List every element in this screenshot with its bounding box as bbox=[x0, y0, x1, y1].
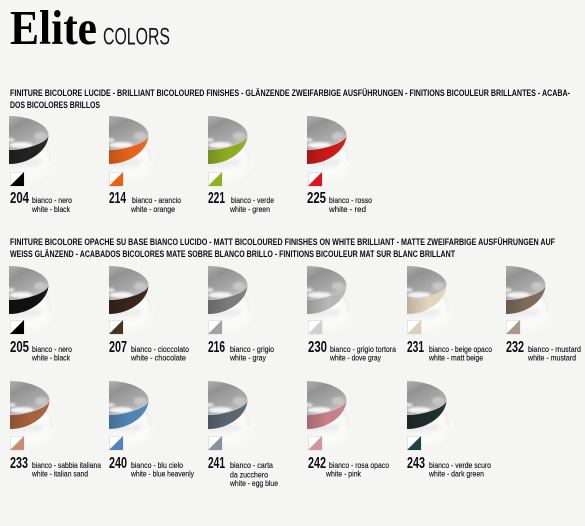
colour 204 bbox=[1, 116, 72, 214]
colour 221: 221 bbox=[208, 190, 225, 207]
heading: matt bicoloured finishes bbox=[10, 237, 555, 260]
colour 232: 232 bbox=[506, 339, 524, 356]
colour 207 bbox=[101, 266, 189, 362]
colour 204: bianco - nero bbox=[32, 195, 72, 205]
colour 225 bbox=[299, 116, 372, 214]
colour 214: white - orange bbox=[130, 204, 175, 214]
title: COLORS bbox=[103, 24, 170, 50]
colour 243: bianco - verde scuro bbox=[429, 460, 491, 470]
colour 216: bianco - grigio bbox=[230, 344, 274, 354]
colour 207: white - chocolate bbox=[130, 352, 186, 362]
colour 221: white - green bbox=[229, 204, 270, 214]
colour 230 bbox=[299, 266, 396, 362]
colour 231: bianco - beige opaco bbox=[429, 344, 492, 354]
colour 241: white - egg blue bbox=[229, 478, 278, 488]
colour 242: bianco - rosa opaco bbox=[329, 460, 389, 470]
colour 231: white - matt beige bbox=[428, 352, 483, 362]
colour 204: white - black bbox=[31, 204, 71, 214]
colour 214: 214 bbox=[109, 190, 126, 207]
colour 216: 216 bbox=[208, 339, 225, 356]
title bbox=[10, 0, 170, 55]
colour 243 bbox=[399, 381, 491, 478]
colour 214 bbox=[101, 116, 181, 214]
colour 242: white - pink bbox=[325, 468, 362, 478]
colour 233: white - italian sand bbox=[31, 468, 88, 478]
colour 221: bianco - verde bbox=[231, 195, 274, 205]
heading: brilliant bicoloured finishes: DOS BICOLORES BRILLOS bbox=[10, 100, 100, 111]
colour 241: 241 bbox=[208, 455, 225, 472]
title: Elite bbox=[10, 0, 97, 55]
colour 232 bbox=[498, 266, 581, 362]
colour 233: 233 bbox=[10, 455, 28, 472]
colour 225: 225 bbox=[307, 190, 326, 207]
colour 243: white - dark green bbox=[428, 468, 484, 478]
colour 241 bbox=[200, 381, 278, 488]
colour 205: bianco - nero bbox=[32, 344, 72, 354]
colour 231: 231 bbox=[407, 339, 424, 356]
colour 205: 205 bbox=[10, 339, 29, 356]
colour 205 bbox=[1, 266, 72, 362]
colour 240: white - blue heavenly bbox=[130, 468, 195, 478]
colour 230: 230 bbox=[308, 339, 327, 356]
colour 242 bbox=[299, 381, 389, 478]
colour 216 bbox=[200, 266, 274, 362]
colour 204: 204 bbox=[10, 190, 29, 207]
colour 232: white - mustard bbox=[527, 352, 576, 362]
colour 225: white - red bbox=[328, 204, 366, 214]
colour 242: 242 bbox=[308, 455, 326, 472]
heading: brilliant bicoloured finishes bbox=[10, 88, 570, 111]
colour 230: white - dove gray bbox=[329, 352, 382, 362]
colour 233 bbox=[2, 381, 101, 478]
colour 231 bbox=[399, 266, 492, 362]
colour 221 bbox=[200, 116, 274, 214]
colour 241: da zucchero bbox=[230, 470, 268, 480]
colour 240 bbox=[101, 381, 195, 478]
colour 207: 207 bbox=[109, 339, 127, 356]
colour 216: white - gray bbox=[229, 352, 267, 362]
colour 240: bianco - blu cielo bbox=[131, 460, 183, 470]
colour 243: 243 bbox=[407, 455, 425, 472]
colour 207: bianco - cioccolato bbox=[131, 344, 189, 354]
colour 225: bianco - rosso bbox=[329, 195, 372, 205]
colour 233: bianco - sabbia italiana bbox=[32, 460, 101, 470]
colour 214: bianco - arancio bbox=[132, 195, 181, 205]
colour 240: 240 bbox=[109, 455, 127, 472]
colour 230: bianco - grigio tortora bbox=[330, 344, 396, 354]
colour 205: white - black bbox=[31, 352, 71, 362]
colour 241: bianco - carta bbox=[230, 460, 273, 470]
